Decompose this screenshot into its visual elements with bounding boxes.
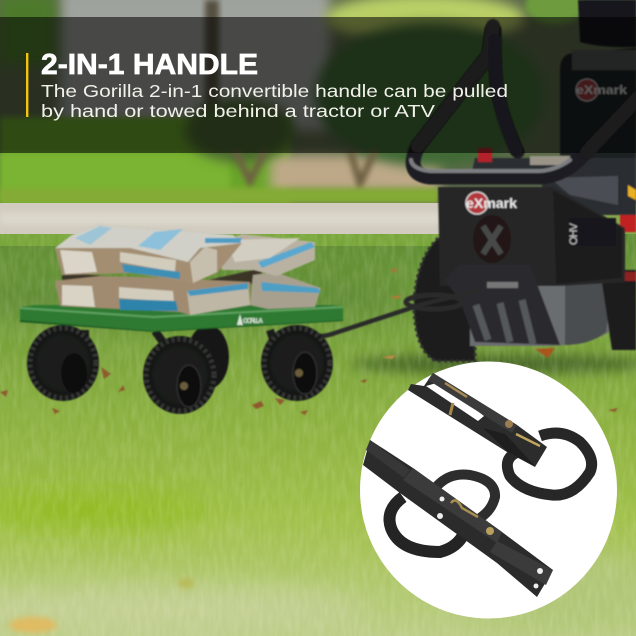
- lower right bag: [250, 272, 321, 309]
- wagon bed: [20, 305, 343, 332]
- upper left bag: [55, 225, 242, 283]
- heading accent bar: [26, 53, 28, 117]
- bag shadow: [62, 268, 262, 294]
- description text: by hand or towed behind a tractor or ATV: [41, 101, 435, 121]
- X vent: [473, 215, 511, 263]
- background: blurred garden photo: [0, 0, 636, 207]
- mower: [406, 0, 636, 361]
- handle over band: [418, 26, 636, 152]
- mower: OHV: [568, 222, 580, 245]
- mower engine and underside: [470, 280, 613, 346]
- lower left bag: [55, 276, 250, 315]
- upper ring: [507, 433, 592, 495]
- left tyre: [27, 325, 99, 401]
- wagon axles: [85, 330, 275, 350]
- back ring: [437, 474, 495, 518]
- description text: The Gorilla 2-in-1 convertible handle can be pulled: [41, 81, 508, 101]
- wagon: [20, 225, 480, 414]
- exmark logo: eXmark: [466, 195, 517, 211]
- mower: eXmark: [576, 83, 627, 97]
- back tyre: [187, 325, 229, 389]
- background: lawn: [0, 234, 636, 636]
- background: road: [0, 203, 440, 236]
- mower rear tyre: [414, 238, 475, 361]
- upper right bag: [217, 234, 315, 276]
- cement bags: [55, 225, 321, 315]
- upper bar with D-ring: [408, 373, 592, 495]
- right tyre: [261, 325, 333, 401]
- wagon bed: GORILLA: [243, 318, 263, 325]
- heading: 2-IN-1 HANDLE: [41, 49, 258, 81]
- hitch plate: [445, 265, 560, 345]
- leaves on lawn: [0, 268, 618, 633]
- description text: [41, 81, 508, 121]
- mower seat: [560, 48, 636, 160]
- rear handle bar: [411, 30, 636, 177]
- middle tyre: [143, 336, 217, 414]
- engine deck: [470, 158, 636, 215]
- dark title band: [0, 17, 636, 153]
- rider: [578, 0, 636, 47]
- lower bar with D-ring: [363, 440, 553, 597]
- tow handle: [310, 290, 480, 336]
- mower body: [438, 187, 625, 286]
- inset circle: handle close-up: [360, 362, 617, 618]
